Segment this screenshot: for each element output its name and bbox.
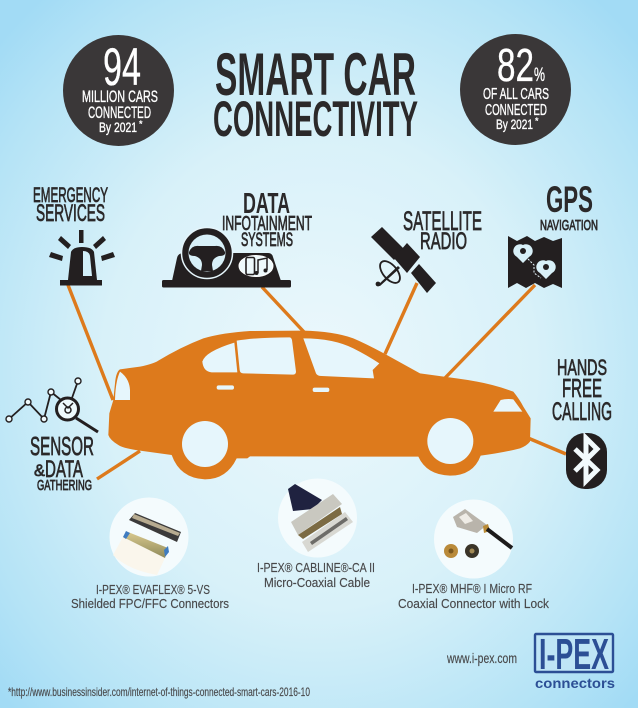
- label: hands free calling: [552, 355, 612, 426]
- badge: 82 percent: %: [534, 65, 545, 86]
- label: data infotainment systems: SYSTEMS: [241, 230, 293, 251]
- badge: 82 percent: By 2021: [496, 116, 533, 132]
- icon: satellite: [371, 227, 436, 293]
- badge: 94 million cars: [63, 35, 174, 146]
- badge: 94 million cars: 94: [103, 38, 141, 97]
- caption: mhf: Coaxial Connector with Lock: [398, 596, 549, 611]
- badge: 94 million cars: By 2021: [99, 119, 137, 135]
- photo: mhf connector: [434, 500, 513, 578]
- label: gps navigation: GPS: [546, 179, 593, 220]
- caption: cabline: [257, 560, 375, 590]
- rear side window: [202, 343, 237, 372]
- badge: 82 percent: CONNECTED: [485, 102, 547, 119]
- badge: 82 percent: [460, 34, 571, 145]
- badge: 94 million cars: MILLION CARS: [82, 87, 158, 106]
- label: emergency services: EMERGENCY: [33, 184, 108, 207]
- door handles: [217, 385, 234, 390]
- badge: 82 percent: 82: [497, 39, 534, 91]
- label: satellite radio: [403, 206, 482, 255]
- label: satellite radio: SATELLITE: [403, 206, 482, 236]
- caption: cabline: I-PEX® CABLINE®-CA II: [257, 560, 375, 575]
- label: data infotainment systems: DATA: [243, 188, 290, 220]
- icon: dashboard with steering wheel: [162, 228, 291, 288]
- connector lines: [68, 283, 566, 479]
- label: gps navigation: [540, 179, 598, 234]
- label: data infotainment systems: [222, 188, 312, 251]
- badge: 94 million cars: *: [139, 119, 143, 129]
- label: emergency services: [33, 184, 108, 227]
- photo: evaflex connectors: [110, 498, 188, 576]
- caption: mhf: [398, 581, 549, 611]
- logo: I-PEX connectors: connectors: [535, 675, 615, 691]
- tail light: [115, 372, 130, 400]
- label: data infotainment systems: INFOTAINMENT: [222, 213, 312, 235]
- caption: evaflex: Shielded FPC/FFC Connectors: [71, 596, 229, 611]
- website: www.i-pex.com: [446, 650, 517, 666]
- icon: emergency beacon: [49, 230, 115, 286]
- badge: 82 percent: OF ALL CARS: [483, 86, 549, 103]
- car: [108, 331, 531, 479]
- title: SMART CAR: [215, 41, 416, 108]
- badge: 94 million cars: CONNECTED: [88, 103, 151, 122]
- caption: cabline: Micro-Coaxial Cable: [264, 575, 370, 590]
- icon: folded map with pins: [508, 236, 562, 288]
- wheels: [182, 421, 228, 467]
- icon: sensor data network with magnifier: [6, 378, 98, 432]
- label: hands free calling: FREE: [562, 373, 602, 403]
- title: [213, 41, 418, 147]
- caption: evaflex: [71, 582, 229, 611]
- photo: cabline connectors: [278, 478, 357, 558]
- middle window: [237, 337, 296, 375]
- head light: [493, 399, 522, 412]
- caption: evaflex: I-PEX® EVAFLEX® 5-VS: [96, 582, 210, 597]
- front window: [303, 338, 379, 378]
- label: sensor and data gathering: SENSOR: [30, 431, 94, 461]
- label: sensor and data gathering: &: [34, 461, 46, 480]
- caption: mhf: I-PEX® MHF® I Micro RF: [412, 581, 532, 596]
- label: satellite radio: RADIO: [420, 228, 467, 255]
- badge: 82 percent: *: [535, 116, 539, 126]
- label: sensor and data gathering: DATA: [45, 456, 83, 483]
- label: emergency services: SERVICES: [36, 200, 105, 227]
- label: sensor and data gathering: [30, 431, 94, 494]
- title: CONNECTIVITY: [213, 91, 418, 147]
- label: sensor and data gathering: GATHERING: [37, 477, 92, 494]
- label: hands free calling: HANDS: [557, 355, 607, 380]
- icon: bluetooth: [566, 433, 607, 489]
- label: gps navigation: NAVIGATION: [540, 217, 598, 234]
- logo: I-PEX connectors: [535, 630, 615, 691]
- footnote: *http://www.businessinsider.com/internet-of-things-connected-smart-cars-2016-10: [8, 685, 310, 699]
